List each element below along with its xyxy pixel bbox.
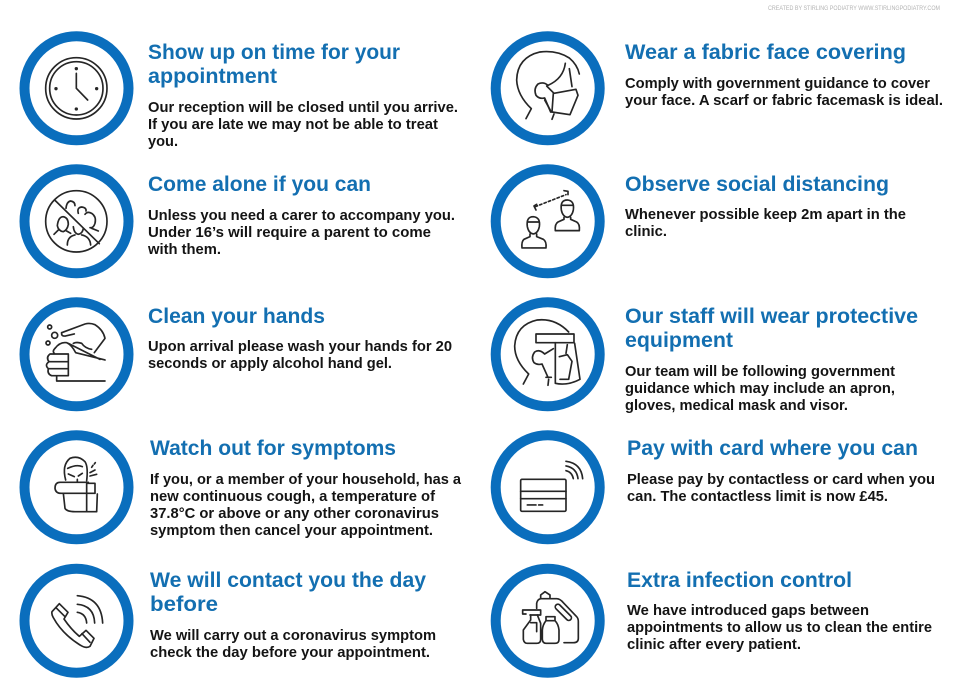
heading: Extra infection control xyxy=(627,569,852,592)
body text: 37.8°C or above or any other coronavirus xyxy=(150,505,439,522)
heading: Pay with card where you can xyxy=(627,437,918,460)
body text xyxy=(625,206,906,240)
body text: seconds or apply alcohol hand gel. xyxy=(148,355,392,372)
icon: head with fabric mask xyxy=(496,36,600,140)
heading: Come alone if you can xyxy=(148,173,371,196)
body text: We will carry out a coronavirus symptom xyxy=(150,627,436,644)
panel: extra infection control xyxy=(496,569,932,673)
icon: two people two metres apart xyxy=(496,169,600,273)
body text: Under 16’s will require a parent to come xyxy=(148,224,431,241)
heading: Observe social distancing xyxy=(625,173,889,196)
body text: clinic. xyxy=(625,223,667,240)
heading xyxy=(148,41,400,88)
body text xyxy=(148,99,458,150)
body text: Whenever possible keep 2m apart in the xyxy=(625,206,906,223)
heading: equipment xyxy=(625,329,733,352)
heading: Wear a fabric face covering xyxy=(625,41,906,64)
body text: gloves, medical mask and visor. xyxy=(625,397,848,414)
body text xyxy=(150,627,436,661)
body text xyxy=(148,338,452,372)
panel: social distancing xyxy=(496,169,906,273)
heading: We will contact you the day xyxy=(150,569,426,592)
heading: before xyxy=(150,593,218,616)
icon: washing hands xyxy=(24,302,128,406)
body text: can. The contactless limit is now £45. xyxy=(627,488,888,505)
body text xyxy=(627,602,932,653)
icon: phone with signal waves xyxy=(24,569,128,673)
icon: clock xyxy=(24,36,128,140)
panel: come alone xyxy=(24,169,455,273)
body text xyxy=(147,207,455,258)
panel: wear a face covering xyxy=(496,36,943,140)
heading: Watch out for symptoms xyxy=(150,437,396,460)
heading: appointment xyxy=(148,65,277,88)
body text: with them. xyxy=(147,241,221,258)
panel: we will contact you xyxy=(24,569,436,673)
body text: clinic after every patient. xyxy=(627,636,801,653)
icon: cleaning bottles xyxy=(496,569,600,673)
credit line: CREATED BY STIRLING PODIATRY WWW.STIRLINGPODIATRY.COM xyxy=(768,5,940,12)
body text: Please pay by contactless or card when you xyxy=(627,471,935,488)
body text: If you, or a member of your household, has a xyxy=(150,471,462,488)
heading: Clean your hands xyxy=(148,305,325,328)
body text: We have introduced gaps between xyxy=(627,602,869,619)
panel: pay with card xyxy=(496,435,935,539)
panel: staff protective equipment xyxy=(496,302,918,414)
body text: Unless you need a carer to accompany you. xyxy=(148,207,455,224)
panel: clean your hands xyxy=(24,302,452,406)
body text: Upon arrival please wash your hands for 20 xyxy=(148,338,452,355)
body text: Comply with government guidance to cover xyxy=(625,75,930,92)
body text xyxy=(150,471,462,539)
body text: If you are late we may not be able to treat xyxy=(148,116,438,133)
body text: you. xyxy=(148,133,178,150)
body text: new continuous cough, a temperature of xyxy=(150,488,436,505)
body text: Our reception will be closed until you arrive. xyxy=(148,99,458,116)
body text xyxy=(627,471,935,505)
body text xyxy=(625,75,943,109)
icon: contactless card xyxy=(496,435,600,539)
body text: Our team will be following government xyxy=(625,363,895,380)
body text: check the day before your appointment. xyxy=(150,644,430,661)
body text: your face. A scarf or fabric facemask is ideal. xyxy=(625,92,943,109)
icon: person coughing into elbow xyxy=(24,435,128,539)
body text: symptom then cancel your appointment. xyxy=(150,522,433,539)
panel: watch out for symptoms xyxy=(24,435,462,539)
body text xyxy=(625,363,895,414)
heading xyxy=(150,569,426,616)
heading: Our staff will wear protective xyxy=(625,305,918,328)
body text: appointments to allow us to clean the entire xyxy=(627,619,932,636)
icon: head with visor and mask xyxy=(496,302,600,406)
panel: show up on time xyxy=(24,36,458,150)
heading: Show up on time for your xyxy=(148,41,400,64)
heading xyxy=(625,305,918,352)
body text: guidance which may include an apron, xyxy=(625,380,895,397)
icon: crossed-out group of people xyxy=(24,169,128,273)
